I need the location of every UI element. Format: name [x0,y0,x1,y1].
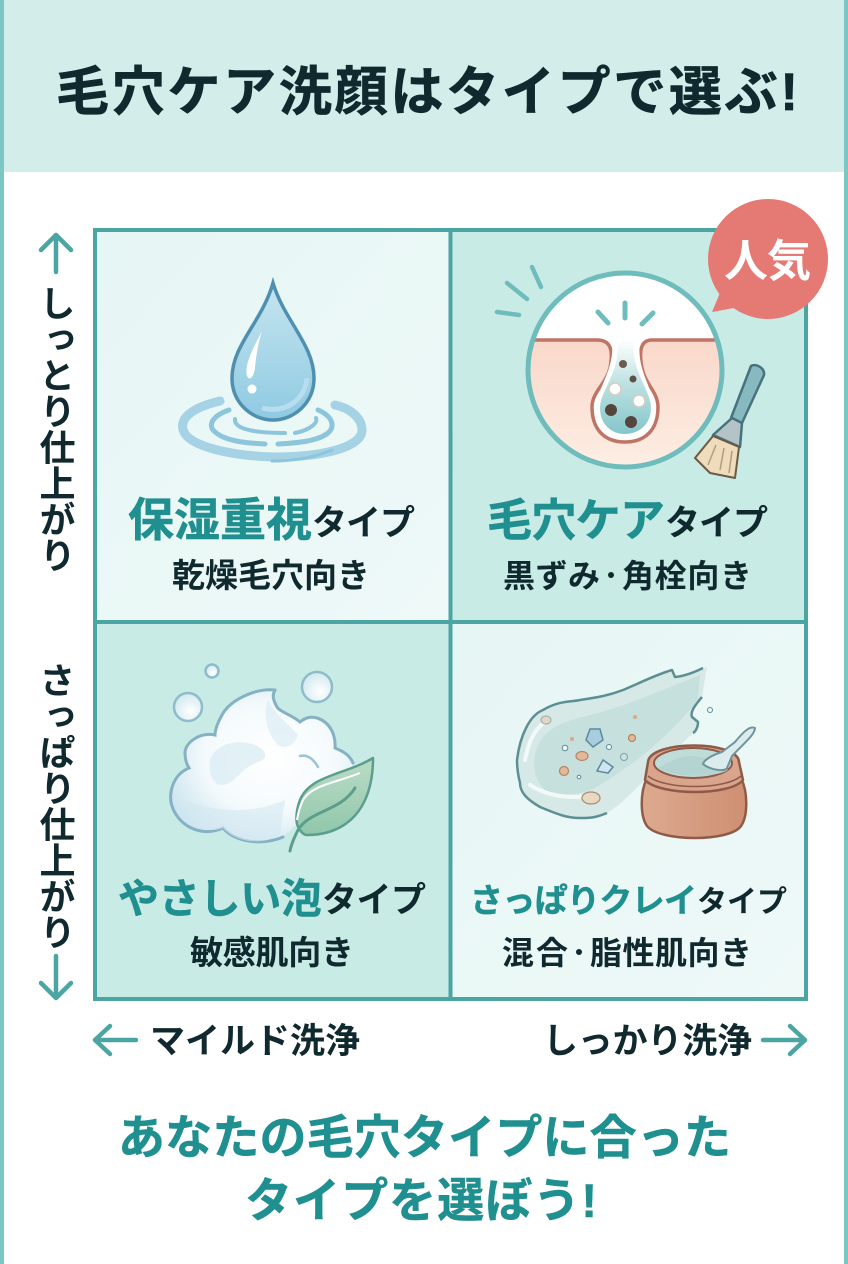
cell label: pore care: タイプ [665,504,768,543]
bubbles [174,664,332,721]
horizontal axis: thorough cleansing: しっかり洗浄 [543,1022,752,1061]
closing message: あなたの毛穴タイプに合った [118,1111,731,1164]
grid frame [95,230,806,999]
icon: water drop with ripples [182,283,362,461]
cell label: clay: タイプ [697,886,787,919]
panel: gentle foam cell background [95,622,450,999]
closing message [118,1111,731,1227]
cell label: pore care: 角栓向き [622,558,752,594]
cell label: clay: 脂性肌向き [590,935,752,971]
rays [497,267,653,324]
leaf [296,758,373,835]
icon: pore illustration [497,267,764,478]
cell label: gentle foam: 敏感肌向き [190,934,354,971]
cell label: moisturizing [128,494,415,594]
cell label: gentle foam [118,876,426,971]
arrow: right [763,1026,805,1054]
vertical axis: fresh finish: さっぱり仕上がり [34,662,76,950]
icon: brush [695,365,764,478]
jar [642,778,746,838]
spoon [703,728,755,770]
popular badge [708,199,828,319]
vertical axis: moist finish: しっとり仕上がり [34,285,76,573]
matrix grid [95,230,806,999]
cell label: pore care: 毛穴ケア [487,495,665,546]
cell label: pore care: 黒ずみ [503,558,600,594]
panel: pore care cell background [450,230,806,622]
panel: clay cell background [450,622,806,999]
cell label: moisturizing: 乾燥毛穴向き [172,557,370,594]
popular badge: 人気 [724,237,811,286]
cell label: clay [470,882,787,971]
cell label: moisturizing: タイプ [312,504,415,543]
horizontal axis: mild cleansing: マイルド洗浄 [150,1022,360,1061]
header band [0,0,848,172]
icon: foam with leaf [171,664,373,851]
pore particles [605,360,645,428]
clay particles [541,708,712,804]
panel: moisturizing cell background [95,230,450,622]
arrow: up [41,235,71,272]
cell label: clay: さっぱりクレイ [470,882,697,919]
icon: clay swatch and jar [517,667,755,838]
cell label: moisturizing: 保湿重視 [128,494,312,546]
cell label: clay: 混合 [502,935,568,971]
arrow: down [41,956,71,998]
closing message: タイプを選ぼう! [245,1174,597,1227]
cell label: pore care [487,495,768,594]
cell label: gentle foam: タイプ [322,881,426,920]
title: 毛穴ケア洗顔はタイプで選ぶ! [56,63,798,122]
cell label: gentle foam: やさしい泡 [118,876,322,922]
arrow: left [95,1026,136,1054]
